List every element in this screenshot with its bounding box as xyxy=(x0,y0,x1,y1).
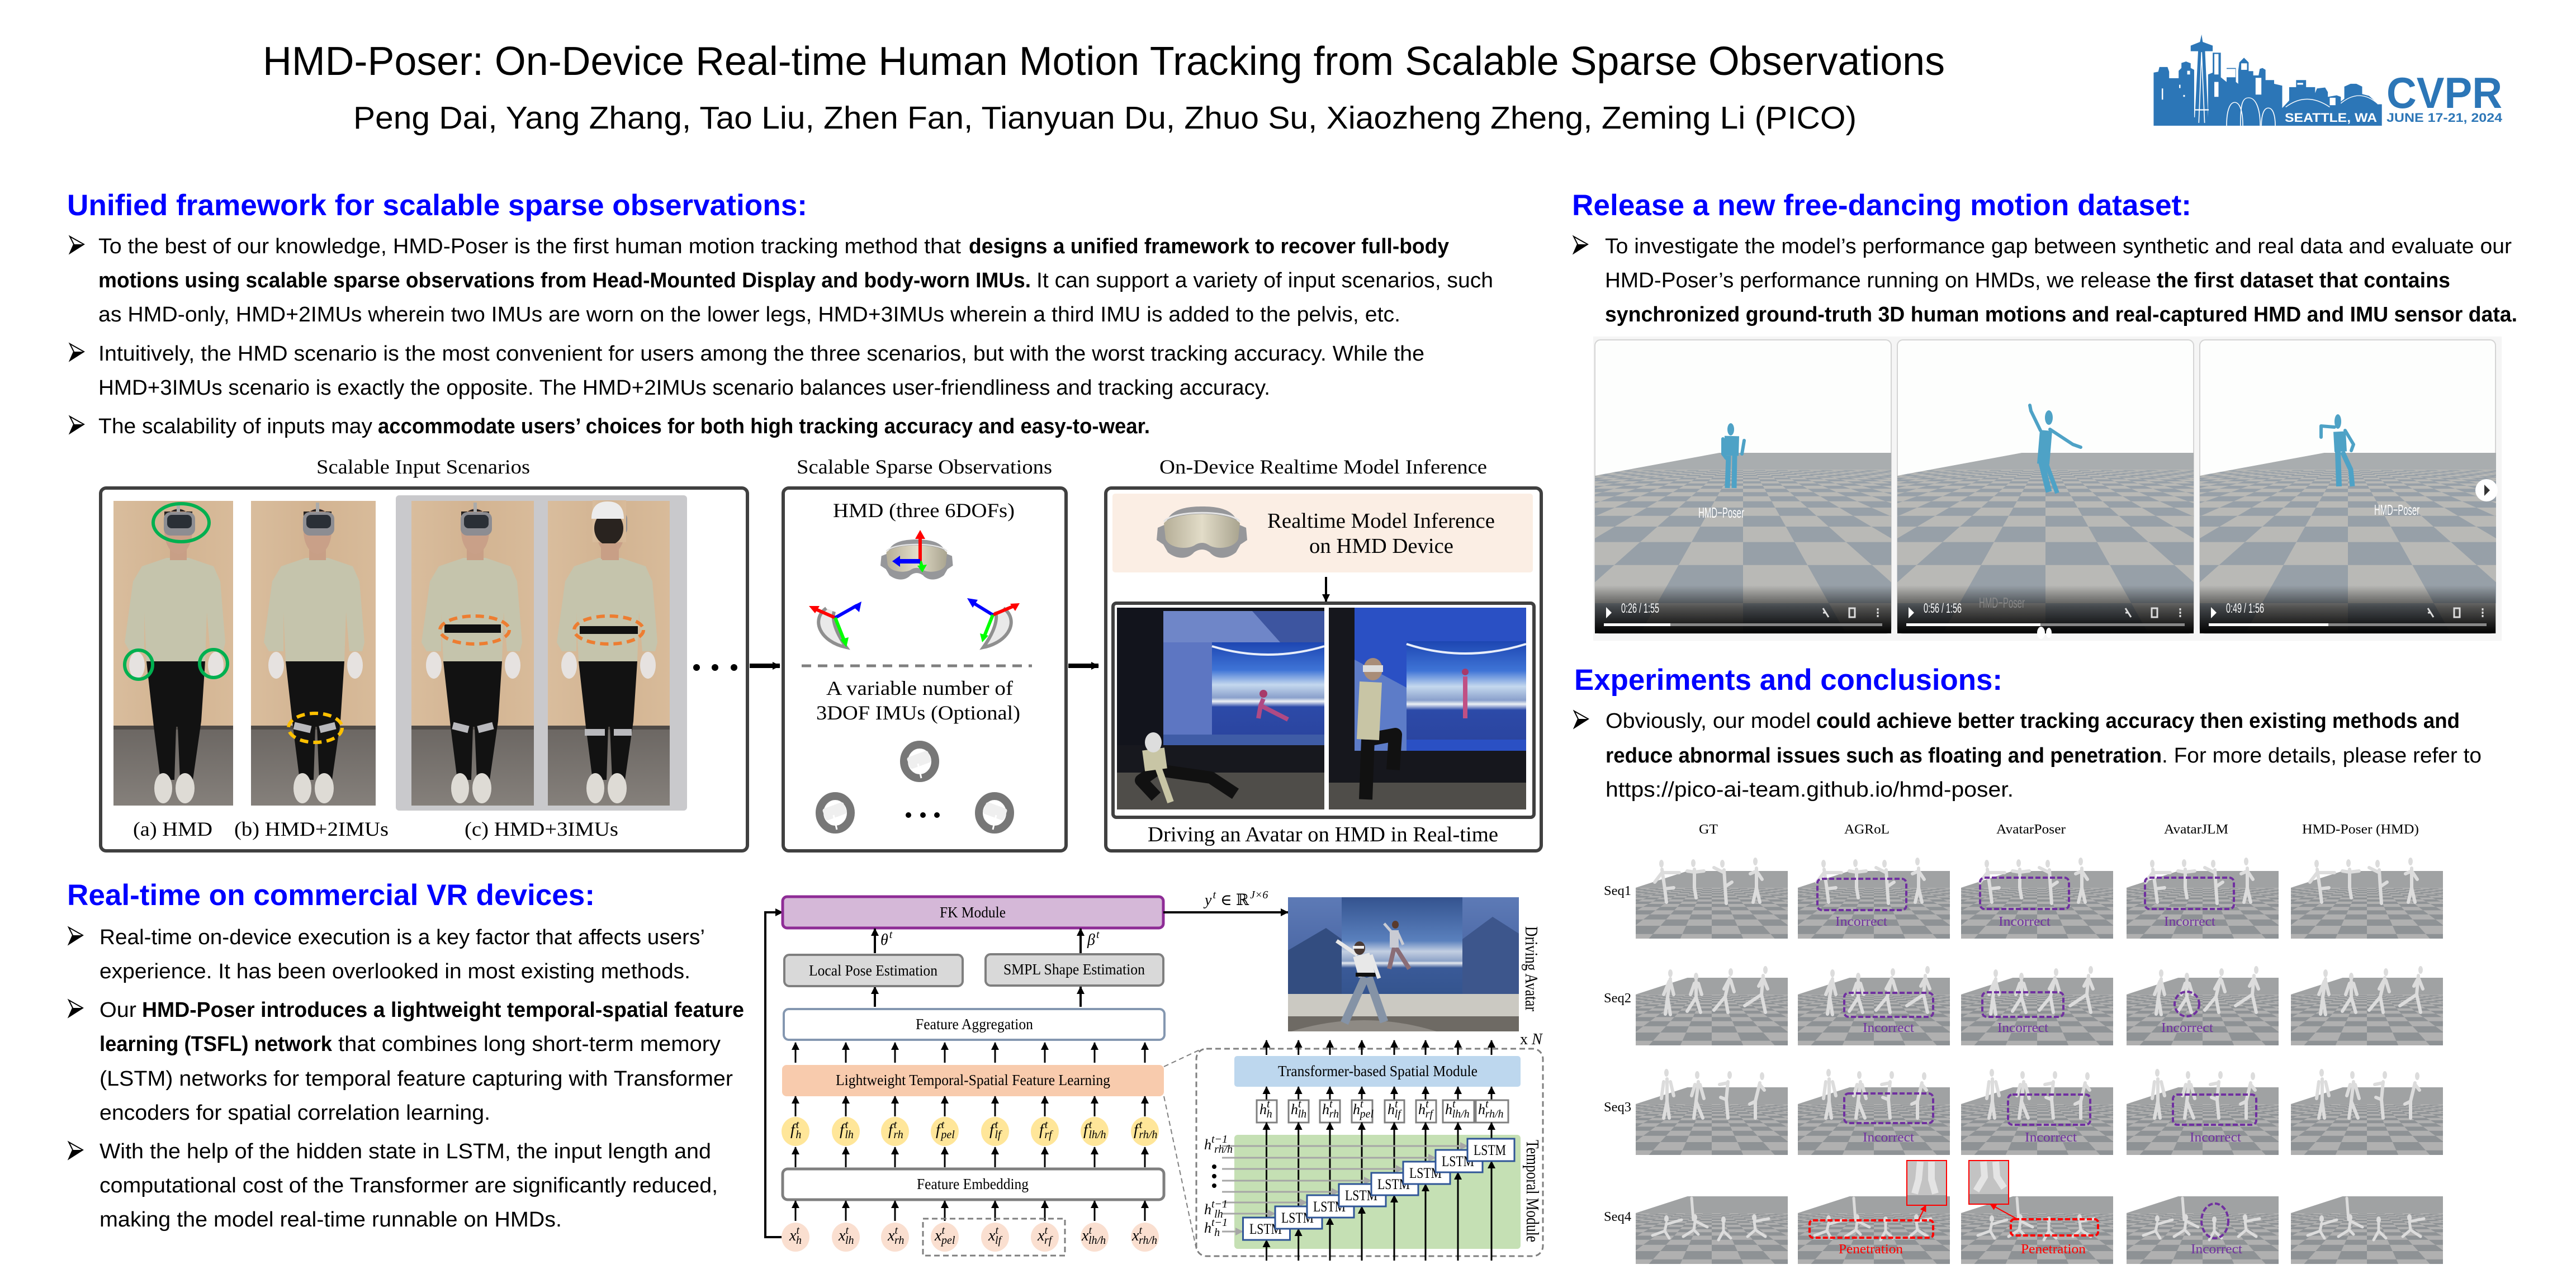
box: SMPL shape estimation xyxy=(986,954,1163,986)
nodes: x inputs: x xyxy=(988,1227,995,1244)
row labels: Seq3 xyxy=(1604,1100,1631,1115)
group: HMD+3IMUs photos xyxy=(396,495,687,811)
logo: CVPR Seattle: SEATTLE, WA xyxy=(2285,111,2377,125)
text block: experiments: could achieve better tracking accuracy then existing methods and xyxy=(1816,709,2460,733)
heading: real-time on commercial VR: Real-time on commercial VR devices: xyxy=(67,879,595,912)
label: HMD three 6DOFs: HMD (three 6DOFs) xyxy=(833,499,1015,522)
text block: unified framework bullets: To the best of our knowledge, HMD-Poser is the first human motion tracking method that xyxy=(98,235,961,258)
annotations: penetration xyxy=(1810,1161,2098,1257)
nodes: f features: rf xyxy=(1044,1129,1053,1141)
labels: previous hidden states: h xyxy=(1214,1227,1220,1239)
labels: previous hidden states: t−1 xyxy=(1211,1216,1228,1229)
icon: right controller with axes xyxy=(967,598,1020,647)
row labels: Seq1 xyxy=(1604,884,1631,898)
icon: headset with axes xyxy=(880,530,953,580)
nodes: f features: t xyxy=(995,1119,998,1131)
box: feature embedding: Feature Embedding xyxy=(917,1176,1029,1192)
nodes: h hidden states: lf xyxy=(1395,1108,1402,1120)
text block: unified framework bullets xyxy=(70,235,1493,438)
nodes: x inputs: x xyxy=(888,1227,894,1244)
detail: TSFL module xyxy=(1164,1031,1543,1261)
video controls 1: 0:26 / 1:55 xyxy=(1621,601,1659,616)
title: HMD-Poser: On-Device Real-time Human Motion Tracking from Scalable Sparse Observations xyxy=(263,39,1945,84)
icons: IMU sensors xyxy=(820,745,1010,830)
nodes: h hidden states: t xyxy=(1329,1098,1333,1110)
heading: release dataset: Release a new free-dancing motion dataset: xyxy=(1572,189,2191,222)
nodes: x inputs: x xyxy=(1132,1227,1139,1244)
nodes: h hidden states: rf xyxy=(1426,1108,1434,1120)
text block: real-time bullets: computational cost of the Transformer are significantly reduced, xyxy=(100,1174,718,1197)
annotations: penetration: Penetration xyxy=(2021,1242,2086,1257)
arrows: to TSFL xyxy=(795,1096,1145,1116)
labels: previous hidden states: t−1 xyxy=(1211,1198,1228,1210)
nodes: x inputs: x xyxy=(1038,1227,1044,1244)
column headers: AvatarPoser xyxy=(1996,822,2066,837)
nodes: f features: rh xyxy=(893,1129,903,1141)
labels: previous hidden states: h xyxy=(1204,1220,1211,1236)
label: theta: θ xyxy=(880,931,888,949)
nodes: f features: lf xyxy=(995,1129,1002,1141)
panel: scalable input scenarios xyxy=(101,488,747,851)
callout: realtime inference on HMD: on HMD Device xyxy=(1309,534,1453,558)
nodes: x inputs: pel xyxy=(940,1234,955,1247)
arrows: hidden state inputs xyxy=(1222,1146,1467,1232)
text block: real-time bullets: making the model real-time runnable on HMDs. xyxy=(100,1208,562,1232)
box: transformer module: Transformer-based Spatial Module xyxy=(1278,1063,1478,1079)
labels: incorrect: Incorrect xyxy=(2161,1021,2213,1035)
nodes: x inputs: h xyxy=(796,1234,802,1247)
arrows: to aggregation xyxy=(795,1043,1145,1063)
figure: dancer 3 xyxy=(2321,414,2354,486)
video card 1: HMD−Poser xyxy=(1698,504,1744,521)
nodes: f features: t xyxy=(894,1119,897,1131)
nodes: f features: lh/h xyxy=(1088,1129,1106,1141)
nodes: f features: f xyxy=(1039,1121,1044,1139)
nodes: f features: f xyxy=(936,1121,940,1139)
box: SMPL shape estimation: SMPL Shape Estimation xyxy=(1003,961,1145,978)
LSTM boxes: LSTM xyxy=(1313,1199,1346,1215)
logo: CVPR Seattle: JUNE 17-21, 2024 xyxy=(2386,111,2503,125)
nodes: h hidden states: t xyxy=(1485,1098,1489,1110)
panel: video screenshots xyxy=(0,337,2576,641)
figure: dancer 2 xyxy=(2030,405,2081,493)
photo: standing user xyxy=(1329,608,1526,809)
box: feature aggregation: Feature Aggregation xyxy=(916,1016,1033,1033)
nodes: f features: t xyxy=(1089,1119,1092,1131)
label: beta: β xyxy=(1087,931,1095,949)
inset: AvatarPoser zoom xyxy=(1969,1161,2009,1204)
ellipsis dots xyxy=(693,664,737,671)
text block: real-time bullets: (LSTM) networks for temporal feature capturing with Transformer xyxy=(100,1067,733,1091)
video controls 3: 0:49 / 1:56 xyxy=(2226,601,2264,616)
column headers: AGRoL xyxy=(1844,822,1890,837)
photo: HMD scenario xyxy=(113,501,233,806)
nodes: h hidden states: lh xyxy=(1298,1108,1306,1120)
video controls 2 xyxy=(1906,601,2185,639)
label: variable number of IMUs: A variable number of xyxy=(826,677,1013,699)
annotations: incorrect regions xyxy=(1817,878,2256,1238)
architecture diagram xyxy=(765,889,1543,1261)
label: variable number of IMUs: 3DOF IMUs (Optional) xyxy=(816,702,1020,724)
label: variable number of IMUs xyxy=(816,677,1020,724)
callout: realtime inference on HMD: Realtime Model Inference xyxy=(1267,509,1495,533)
nodes: f features: t xyxy=(941,1119,945,1131)
nodes: x inputs: x xyxy=(935,1227,941,1244)
nodes: h hidden states: t xyxy=(1360,1098,1363,1110)
photo: HMD+3IMUs back xyxy=(548,500,670,806)
nodes: h hidden states: h xyxy=(1418,1101,1426,1117)
label: output math: y xyxy=(1205,892,1211,909)
text block: experiments: Obviously, our model xyxy=(1606,709,1811,733)
arrows: top outputs xyxy=(1267,1040,1491,1055)
nodes: x inputs: lf xyxy=(995,1234,1003,1247)
arrows: to embedding xyxy=(795,1201,1145,1221)
video controls 3 xyxy=(2209,601,2487,626)
results row: Seq4 xyxy=(1397,1194,2576,1264)
video card 1 xyxy=(0,340,2576,633)
nodes: h hidden states xyxy=(1257,1098,1508,1123)
label: output math: J×6 xyxy=(1250,889,1268,901)
labels: incorrect: Incorrect xyxy=(2164,915,2215,929)
nodes: h hidden states: h xyxy=(1353,1101,1360,1117)
photo: HMD+3IMUs front xyxy=(411,501,534,806)
nodes: x inputs: t xyxy=(995,1224,998,1237)
label: x N: x N xyxy=(1520,1031,1543,1048)
label: theta: t xyxy=(889,929,893,941)
photo: HMD+2IMUs scenario xyxy=(251,501,376,806)
text block: real-time bullets: HMD-Poser introduces a lightweight temporal-spatial feature xyxy=(142,998,744,1022)
labels: incorrect: Incorrect xyxy=(2190,1130,2241,1145)
box: lightweight temporal-spatial learning: Lightweight Temporal-Spatial Feature Learning xyxy=(836,1072,1110,1088)
icon: next button xyxy=(2475,479,2498,501)
row labels xyxy=(1604,884,1631,1224)
nodes: h hidden states: h xyxy=(1267,1108,1272,1120)
nodes: f features: f xyxy=(888,1121,893,1139)
label: temporal module: Temporal Module xyxy=(1523,1140,1543,1242)
labels: incorrect: Incorrect xyxy=(1835,915,1887,929)
heading: scalable input scenarios: Scalable Input Scenarios xyxy=(316,456,530,478)
nodes: x inputs: t xyxy=(1044,1224,1048,1237)
text block: unified framework bullets: motions using scalable sparse observations from Head-Mounted Display and body-worn IMUs. xyxy=(98,269,1031,292)
logo: CVPR Seattle xyxy=(2153,35,2503,126)
video card 2 xyxy=(297,340,2576,639)
arrows: vertical LSTM inputs and outputs xyxy=(1267,1123,1491,1261)
labels: incorrect: Incorrect xyxy=(2191,1242,2242,1257)
nodes: f features: h xyxy=(795,1129,801,1141)
nodes: f features: t xyxy=(845,1119,849,1131)
nodes: x inputs: x xyxy=(839,1227,845,1244)
nodes: f features: f xyxy=(840,1121,844,1139)
results row: Seq2 xyxy=(1397,966,2576,1045)
nodes: f features: f xyxy=(1134,1121,1138,1139)
authors: Peng Dai, Yang Zhang, Tao Liu, Zhen Fan, Tianyuan Du, Zhuo Su, Xiaozheng Zheng, Zeming Li (PICO) xyxy=(353,100,1857,136)
text block: unified framework bullets: HMD+3IMUs scenario is exactly the opposite. The HMD+2IMUs scenario balances user-friendliness and tracking accuracy. xyxy=(98,376,1270,400)
photo: crouching user xyxy=(1117,608,1324,809)
text block: real-time bullets: Our xyxy=(100,998,136,1022)
text block: unified framework bullets: as HMD-only, HMD+2IMUs wherein two IMUs are worn on the lower legs, HMD+3IMUs wherein a third IMU is added to the pelvis, etc. xyxy=(98,303,1400,326)
optional IMU dashed box xyxy=(923,1219,1065,1256)
nodes: h hidden states: h xyxy=(1259,1101,1267,1117)
label: beta: t xyxy=(1096,929,1100,941)
row labels: Seq2 xyxy=(1604,991,1631,1006)
labels: previous hidden states: h xyxy=(1204,1201,1211,1218)
LSTM boxes: LSTM xyxy=(1409,1165,1442,1181)
labels: previous hidden states: t−1 xyxy=(1211,1133,1228,1145)
labels: incorrect: Incorrect xyxy=(2025,1130,2077,1145)
text block: release dataset: HMD-Poser’s performance running on HMDs, we release xyxy=(1605,269,2151,292)
box: feature aggregation xyxy=(784,1009,1164,1040)
box: local pose estimation: Local Pose Estimation xyxy=(809,962,937,979)
nodes: h hidden states: h xyxy=(1291,1101,1298,1117)
photo: driving avatar xyxy=(1288,897,1519,1031)
nodes: x inputs: lh xyxy=(845,1234,854,1247)
LSTM boxes: LSTM xyxy=(1281,1210,1314,1226)
column headers: GT xyxy=(1699,822,1718,837)
nodes: h hidden states: t xyxy=(1267,1098,1270,1110)
text block: unified framework bullets: The scalability of inputs may xyxy=(98,415,372,438)
text block: release dataset: synchronized ground-truth 3D human motions and real-captured HMD and IMU sensor data. xyxy=(1605,303,2517,326)
caption: driving an avatar: Driving an Avatar on HMD in Real-time xyxy=(1148,823,1498,846)
label: output math: ∈ ℝ xyxy=(1220,892,1249,909)
heading: scalable sparse observations: Scalable Sparse Observations xyxy=(797,456,1052,478)
text block: real-time bullets: With the help of the hidden state in LSTM, the input length and xyxy=(100,1140,711,1163)
text block: release dataset: To investigate the model’s performance gap between synthetic and real data and evaluate our xyxy=(1605,235,2512,258)
nodes: h hidden states: t xyxy=(1298,1098,1301,1110)
LSTM boxes: LSTM xyxy=(1249,1221,1282,1237)
text block: experiments xyxy=(1574,709,2482,802)
results row: Seq1 xyxy=(1397,858,2576,939)
nodes: f features: rh/h xyxy=(1139,1129,1157,1141)
nodes: x inputs xyxy=(782,1223,1159,1252)
text block: real-time bullets: experience. It has been overlooked in most existing methods. xyxy=(100,960,690,983)
nodes: x inputs: rf xyxy=(1044,1234,1053,1247)
nodes: f features: t xyxy=(1045,1119,1048,1131)
arrow: feedback line xyxy=(765,912,783,1237)
caption: (c) HMD+3IMUs: (c) HMD+3IMUs xyxy=(465,818,618,840)
video controls 2: 0:56 / 1:56 xyxy=(1924,601,1962,616)
panel: on-device inference xyxy=(1106,488,1541,851)
nodes: h hidden states: h xyxy=(1478,1101,1485,1117)
labels: incorrect: Incorrect xyxy=(1863,1130,1914,1145)
text block: real-time bullets: learning (TSFL) network xyxy=(100,1033,333,1056)
text block: unified framework bullets: Intuitively, the HMD scenario is the most convenient for users among the three scenarios, but with the worst tracking accuracy. While the xyxy=(98,342,1424,366)
LSTM boxes: LSTM xyxy=(1377,1176,1410,1192)
labels: incorrect: Incorrect xyxy=(1999,915,2051,929)
box: transformer module xyxy=(1234,1056,1521,1087)
photos frame xyxy=(1113,603,1534,817)
caption: (b) HMD+2IMUs: (b) HMD+2IMUs xyxy=(234,818,389,840)
nodes: x inputs: t xyxy=(941,1224,945,1237)
callout: realtime inference on HMD xyxy=(1112,494,1533,572)
label: output math: t xyxy=(1213,889,1216,901)
nodes: x inputs: x xyxy=(789,1227,796,1244)
nodes: x inputs: t xyxy=(796,1224,799,1237)
nodes: x inputs: rh/h xyxy=(1139,1234,1157,1247)
box: FK module: FK Module xyxy=(940,904,1006,921)
arrow: output xyxy=(1163,911,1288,913)
nodes: f features xyxy=(782,1117,1159,1146)
nodes: f features: lh xyxy=(845,1129,854,1141)
nodes: f features: pel xyxy=(940,1129,955,1141)
nodes: h hidden states: t xyxy=(1452,1098,1456,1110)
LSTM boxes: LSTM xyxy=(1474,1142,1506,1158)
arrow: scenarios to observations xyxy=(750,664,780,668)
LSTM boxes: LSTM xyxy=(1345,1187,1377,1204)
arrows: to f features xyxy=(795,1147,1145,1167)
nodes: h hidden states: t xyxy=(1426,1098,1429,1110)
labels: previous hidden states xyxy=(1204,1133,1233,1239)
nodes: h hidden states: t xyxy=(1395,1098,1398,1110)
text block: experiments: https://pico-ai-team.github.io/hmd-poser. xyxy=(1606,778,2014,802)
nodes: x inputs: t xyxy=(894,1224,898,1237)
box: local pose estimation xyxy=(784,955,963,986)
box: FK module xyxy=(783,897,1163,928)
box: lightweight temporal-spatial learning xyxy=(782,1065,1164,1096)
heading: unified framework: Unified framework for scalable sparse observations: xyxy=(67,189,807,222)
labels: incorrect xyxy=(1835,915,2242,1257)
arrows: pose and shape outputs xyxy=(875,929,1081,1007)
video card 2: HMD−Poser xyxy=(1979,594,2025,611)
caption: (a) HMD: (a) HMD xyxy=(133,818,212,840)
text block: real-time bullets xyxy=(69,926,744,1232)
icon: left controller with axes xyxy=(809,602,861,647)
annotations: penetration: Penetration xyxy=(1839,1242,1903,1257)
labels: previous hidden states: h xyxy=(1204,1137,1211,1153)
text block: release dataset xyxy=(1574,235,2517,326)
labels: incorrect: Incorrect xyxy=(1997,1021,2048,1035)
heading: experiments: Experiments and conclusions: xyxy=(1574,664,2002,697)
text block: unified framework bullets: accommodate users’ choices for both high tracking accuracy and easy-to-wear. xyxy=(378,415,1150,438)
logo: CVPR Seattle: CVPR xyxy=(2386,68,2502,117)
nodes: f features: t xyxy=(796,1119,799,1131)
nodes: h hidden states: rh xyxy=(1329,1108,1339,1120)
video controls 1 xyxy=(1604,601,1882,626)
nodes: f features: f xyxy=(1083,1121,1088,1139)
results figure xyxy=(1397,822,2576,1264)
arrow: down xyxy=(1325,577,1327,602)
labels: incorrect: Incorrect xyxy=(1863,1021,1914,1035)
nodes: x inputs: rh xyxy=(894,1234,904,1247)
arrows: to transformer xyxy=(1267,1087,1491,1101)
label: driving avatar: Driving Avatar xyxy=(1522,926,1542,1011)
nodes: f features: f xyxy=(790,1121,795,1139)
column headers: HMD-Poser (HMD) xyxy=(2302,822,2419,837)
heading: on-device realtime model inference: On-Device Realtime Model Inference xyxy=(1159,456,1487,478)
column headers: AvatarJLM xyxy=(2164,822,2228,837)
box: temporal module background xyxy=(1234,1135,1521,1249)
nodes: f features: f xyxy=(989,1121,994,1139)
nodes: x inputs: x xyxy=(1082,1227,1088,1244)
results row: Seq3 xyxy=(1397,1069,2576,1155)
text block: real-time bullets: that combines long short-term memory xyxy=(338,1033,721,1056)
text block: real-time bullets: Real-time on-device execution is a key factor that affects users’ xyxy=(100,926,705,949)
nodes: x inputs: lh/h xyxy=(1088,1234,1106,1247)
inset: AGRoL zoom xyxy=(1907,1161,1947,1205)
text block: unified framework bullets: designs a unified framework to recover full-body xyxy=(969,235,1449,258)
nodes: h hidden states: rh/h xyxy=(1485,1108,1504,1120)
nodes: x inputs: t xyxy=(845,1224,849,1237)
LSTM boxes xyxy=(1243,1139,1514,1240)
nodes: h hidden states: h xyxy=(1388,1101,1395,1117)
nodes: h hidden states: pel xyxy=(1359,1108,1374,1120)
labels: previous hidden states: rh/h xyxy=(1214,1143,1233,1156)
arrow: observations to inference xyxy=(1068,664,1098,668)
text block: real-time bullets: encoders for spatial correlation learning. xyxy=(100,1101,490,1125)
panel: scalable sparse observations xyxy=(783,488,1066,851)
text block: experiments: . For more details, please refer to xyxy=(2162,744,2482,768)
text block: release dataset: the first dataset that contains xyxy=(2157,269,2450,292)
nodes: h hidden states: h xyxy=(1322,1101,1329,1117)
nodes: h hidden states: h xyxy=(1445,1101,1452,1117)
nodes: x inputs: t xyxy=(1088,1224,1092,1237)
nodes: h hidden states: lh/h xyxy=(1452,1108,1470,1120)
text block: experiments: reduce abnormal issues such as floating and penetration xyxy=(1606,744,2162,768)
text block: unified framework bullets: It can support a variety of input scenarios, such xyxy=(1036,269,1493,292)
column headers xyxy=(1699,822,2419,837)
LSTM boxes: LSTM xyxy=(1442,1153,1474,1169)
labels: previous hidden states: lh xyxy=(1214,1208,1223,1220)
box: feature embedding xyxy=(783,1169,1164,1200)
row labels: Seq4 xyxy=(1604,1210,1631,1224)
video card 3 xyxy=(599,340,2576,633)
nodes: x inputs: t xyxy=(1139,1224,1142,1237)
figure: dancer 1 xyxy=(1723,423,1744,488)
nodes: f features: t xyxy=(1139,1119,1143,1131)
video card 3: HMD−Poser xyxy=(2374,501,2419,518)
